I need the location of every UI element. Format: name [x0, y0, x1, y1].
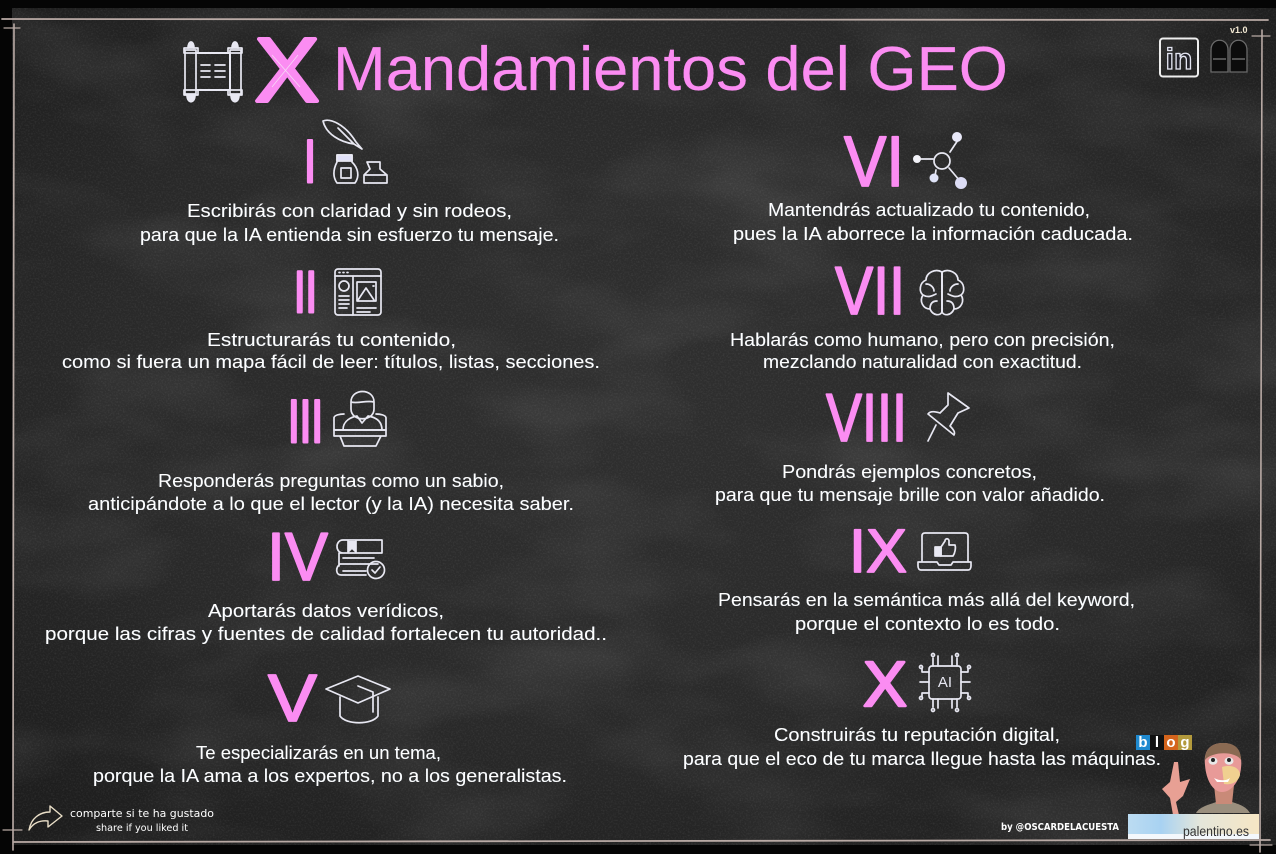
- icon: brain: [920, 271, 964, 315]
- icon: AI chip: AI: [938, 674, 952, 691]
- text block: Pondrás ejemplos concretos,: [782, 462, 1037, 482]
- icon: linkedin: [1160, 38, 1198, 76]
- commandment IV: [45, 519, 607, 644]
- icon: share arrow: [29, 806, 62, 830]
- commandment III: III: [288, 388, 323, 455]
- commandment IX: [718, 517, 1135, 634]
- commandment IX: porque el contexto lo es todo.: [795, 614, 1060, 634]
- text block: Aportarás datos verídicos,: [208, 601, 444, 621]
- commandment IV: IV: [267, 519, 329, 595]
- text block: Mantendrás actualizado tu contenido,: [768, 200, 1090, 220]
- commandment IX: IX: [849, 517, 907, 585]
- commandment V: porque la IA ama a los expertos, no a los generalistas.: [93, 766, 567, 786]
- commandment VI: VI: [844, 123, 904, 202]
- commandment VI: [733, 123, 1133, 244]
- title: Mandamientos del GEO: [333, 35, 1008, 104]
- palentino banner: palentino.es: [1183, 823, 1249, 839]
- title: [255, 21, 1008, 121]
- icon: books with check: [337, 540, 384, 578]
- text block: Estructurarás tu contenido,: [207, 330, 456, 350]
- avatar: pointing character: [1162, 743, 1250, 815]
- icon: web layout: [335, 269, 381, 315]
- commandment II: II: [294, 260, 317, 325]
- palentino banner: [1128, 814, 1259, 839]
- blog tiles: o: [1166, 734, 1176, 751]
- text block: Hablarás como humano, pero con precisión,: [730, 330, 1115, 350]
- commandment III: [88, 388, 574, 514]
- blog tiles: [1136, 734, 1192, 751]
- commandment VI: pues la IA aborrece la información caducada.: [733, 224, 1133, 244]
- title: X: [255, 21, 319, 121]
- commandment V: [93, 661, 567, 786]
- commandment I: para que la IA entienda sin esfuerzo tu mensaje.: [140, 225, 559, 245]
- icon: laptop thumbs up: [918, 533, 971, 570]
- blog tiles: l: [1155, 734, 1159, 751]
- share caption: comparte si te ha gustado: [70, 808, 214, 820]
- icon: scroll: [184, 42, 242, 102]
- commandment I: [140, 120, 559, 245]
- icon: AI chip: [920, 654, 970, 712]
- author credit: by @OSCARDELACUESTA: [1001, 822, 1120, 833]
- share caption: share if you liked it: [96, 823, 188, 834]
- commandment X: [683, 648, 1161, 769]
- icon: network nodes: [913, 132, 967, 189]
- commandment VII: VII: [835, 253, 905, 329]
- commandment IV: porque las cifras y fuentes de calidad fortalecen tu autoridad..: [45, 624, 607, 644]
- icon: push pin: [928, 393, 969, 441]
- text block: Te especializarás en un tema,: [196, 743, 441, 763]
- commandment II: [62, 260, 600, 372]
- commandment II: como si fuera un mapa fácil de leer: títulos, listas, secciones.: [62, 352, 600, 372]
- commandment VII: mezclando naturalidad con exactitud.: [763, 352, 1082, 372]
- blog tiles: b: [1138, 734, 1148, 751]
- icon: graduation cap: [326, 676, 390, 723]
- icon: quill and ink: [323, 120, 387, 183]
- commandment III: anticipándote a lo que el lector (y la IA) necesita saber.: [88, 494, 574, 514]
- commandment V: V: [268, 661, 317, 736]
- text block: Escribirás con claridad y sin rodeos,: [187, 201, 512, 221]
- blog tiles: g: [1180, 734, 1190, 751]
- commandment X: para que el eco de tu marca llegue hasta las máquinas.: [683, 749, 1161, 769]
- text block: Construirás tu reputación digital,: [774, 725, 1060, 745]
- text block: Responderás preguntas como un sabio,: [158, 471, 504, 491]
- icon: tablets: [1211, 40, 1247, 72]
- version label: v1.0: [1230, 25, 1248, 35]
- icon: linkedin: in: [1166, 43, 1192, 76]
- commandment X: X: [863, 648, 907, 720]
- commandment VIII: [715, 380, 1105, 505]
- share caption: [70, 808, 214, 834]
- icon: speaker at lectern: [334, 392, 386, 446]
- text block: Pensarás en la semántica más allá del keyword,: [718, 590, 1135, 610]
- commandment VIII: VIII: [826, 380, 907, 456]
- commandment VII: [730, 253, 1115, 372]
- commandment I: I: [304, 128, 316, 195]
- commandment VIII: para que tu mensaje brille con valor añadido.: [715, 485, 1105, 505]
